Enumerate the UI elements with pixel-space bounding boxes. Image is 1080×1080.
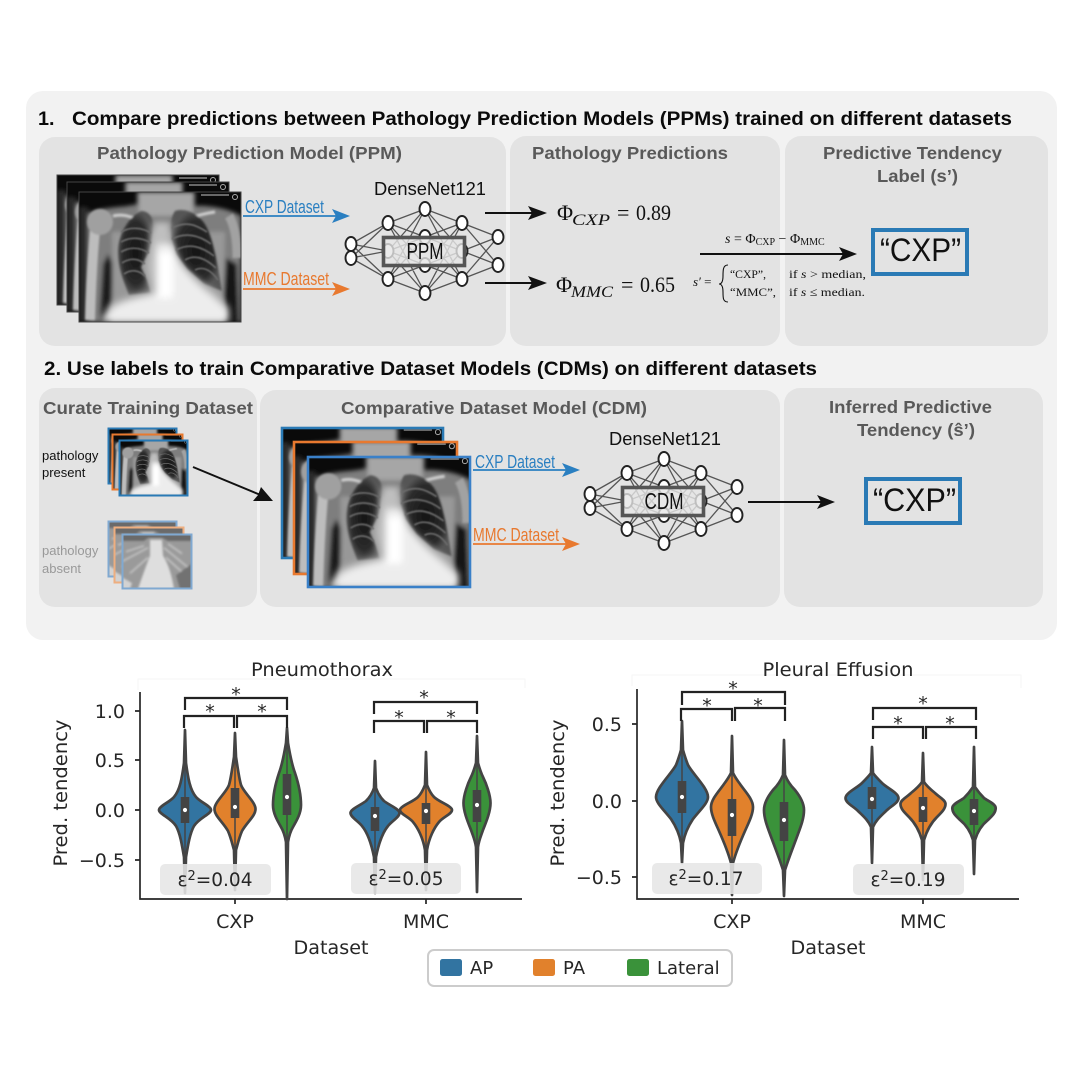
image stack: CDM (281, 427, 471, 588)
image stack: pathology absent (108, 521, 192, 589)
panel: Comparative Dataset Model (260, 390, 780, 607)
neural network: PPM (346, 178, 504, 300)
image stack: pathology present (108, 428, 188, 496)
effect size: MMC 0.19: ε (871, 870, 881, 891)
equation: CXP prediction: CXP (572, 212, 611, 229)
legend: Lateral (657, 958, 720, 979)
significance brackets: Pleural Effusion: * (945, 713, 955, 735)
equation: s definition: MMC (800, 237, 825, 248)
heading 1: 1. (38, 108, 54, 130)
effect size: MMC 0.05: 2 (379, 868, 387, 883)
chart: Pneumothorax violin plot: Pred. tendency (50, 720, 72, 866)
equation: CXP prediction: 0.89 (636, 200, 671, 225)
label box: inferred CXP: “CXP” (873, 482, 956, 518)
neural network: PPM: PPM (406, 238, 444, 264)
significance brackets: Pneumothorax: * (231, 684, 241, 706)
arrow: CXP dataset: CXP Dataset (245, 196, 324, 217)
panel: Predictive Tendency Label (785, 136, 1048, 346)
significance brackets: Pleural Effusion: * (702, 695, 712, 717)
effect size: CXP 0.04: 2 (188, 869, 196, 884)
chart: Pleural Effusion violin plot: 0.5 (592, 714, 622, 736)
chart: Pleural Effusion violin plot: CXP (713, 911, 751, 933)
label: pathology absent (42, 543, 99, 576)
neural network: CDM: CDM (644, 488, 684, 514)
chart: Pneumothorax violin plot: −0.5 (79, 850, 125, 872)
chart: Pleural Effusion violin plot (547, 659, 1021, 959)
effect size: CXP 0.17 (652, 863, 762, 894)
significance brackets: Pneumothorax: * (394, 707, 404, 729)
panel: Inferred Predictive Tendency: Inferred Predictive (829, 397, 992, 417)
equation: piecewise label: if s ≤ median. (789, 285, 865, 299)
chart: Pleural Effusion violin plot: MMC (900, 911, 946, 933)
arrow: CDM MMC dataset: MMC Dataset (473, 524, 559, 545)
equation: MMC prediction: Φ (556, 272, 572, 297)
effect size: CXP 0.04: =0.04 (196, 870, 252, 891)
chart: Pneumothorax violin plot (50, 659, 525, 959)
arrow: to MMC prediction (485, 276, 547, 290)
significance brackets: Pneumothorax (184, 684, 477, 733)
chart: Pneumothorax violin plot: 1.0 (95, 701, 125, 723)
significance brackets: Pneumothorax: * (257, 701, 267, 723)
heading 2: 2. Use labels to train Comparative Dataset Models (CDMs) on different datasets (44, 358, 817, 380)
significance brackets: Pleural Effusion: * (753, 695, 763, 717)
significance brackets: Pleural Effusion: * (728, 678, 738, 700)
effect size: CXP 0.04 (160, 864, 271, 895)
chart: Pneumothorax violin plot: Pneumothorax (251, 659, 393, 681)
effect size: MMC 0.19: 2 (881, 869, 889, 884)
effect size: CXP 0.17: 2 (679, 868, 687, 883)
legend (428, 950, 732, 986)
significance brackets: Pneumothorax: * (205, 701, 215, 723)
effect size: MMC 0.19 (853, 864, 964, 895)
effect size: CXP 0.17: =0.17 (687, 869, 743, 890)
panel: Curate Training Dataset (39, 388, 257, 607)
equation: piecewise label: “MMC”, (730, 285, 776, 299)
equation: piecewise label (693, 265, 866, 302)
chart: Pleural Effusion violin plot: 0.0 (592, 791, 622, 813)
equation: MMC prediction: MMC (570, 284, 614, 301)
significance brackets: Pleural Effusion: * (893, 713, 903, 735)
equation: MMC prediction: = (621, 272, 633, 297)
panel: Predictive Tendency Label: Predictive Tendency (823, 143, 1002, 163)
equation: s definition: s = Φ (725, 232, 756, 247)
panel: Pathology Predictions (510, 136, 780, 346)
arrow: MMC dataset: MMC Dataset (243, 268, 329, 289)
chart: Pneumothorax violin plot: 0.0 (95, 800, 125, 822)
chart: Pleural Effusion violin plot: Dataset (790, 937, 866, 959)
equation: piecewise label: if s > median, (789, 267, 866, 281)
panel: Inferred Predictive Tendency (784, 388, 1043, 607)
significance brackets: Pleural Effusion (681, 678, 976, 739)
arrow: curated data to CDM (193, 467, 273, 501)
panel: Pathology Prediction Model (39, 137, 506, 346)
equation: s definition: − Φ (775, 232, 800, 247)
effect size: MMC 0.19: =0.19 (889, 870, 945, 891)
significance brackets: Pleural Effusion: * (918, 693, 928, 715)
panel: Pathology Prediction Model: Pathology Prediction Model (PPM) (97, 143, 402, 163)
arrow: to CXP prediction (485, 206, 547, 220)
neural network: PPM: DenseNet121 (374, 178, 486, 199)
equation: piecewise label: s′ = (693, 274, 712, 289)
label box: CXP: “CXP” (880, 232, 961, 268)
neural network: CDM: DenseNet121 (609, 428, 721, 449)
panel: Curate Training Dataset: Curate Training Dataset (43, 398, 253, 418)
chart: Pneumothorax violin plot: CXP (216, 911, 254, 933)
arrow: CDM to inferred tendency (748, 495, 835, 509)
effect size: MMC 0.05: ε (369, 869, 379, 890)
outer panel background (26, 91, 1057, 640)
violins: Pleural Effusion (656, 721, 996, 896)
panel: Inferred Predictive Tendency: Tendency (ŝ’) (857, 420, 975, 440)
chart: Pneumothorax violin plot: Dataset (294, 937, 368, 959)
panel: Comparative Dataset Model: Comparative Dataset Model (CDM) (341, 398, 647, 418)
significance brackets: Pneumothorax: * (446, 707, 456, 729)
chart: Pleural Effusion violin plot: Pred. tendency (547, 720, 569, 866)
significance brackets: Pneumothorax: * (419, 687, 429, 709)
equation: CXP prediction: = (617, 200, 629, 225)
legend: AP (470, 958, 493, 979)
equation: CXP prediction: Φ (557, 200, 573, 225)
label: pathology present: pathology (42, 448, 99, 463)
equation: piecewise label: “CXP”, (730, 267, 766, 281)
label: pathology present: present (42, 465, 86, 480)
equation: s definition: CXP (756, 237, 775, 248)
heading 1: Compare predictions between Pathology Prediction Models (PPMs) trained on different datasets (72, 108, 1012, 130)
equation: MMC prediction: 0.65 (640, 272, 675, 297)
label: pathology absent: absent (42, 561, 81, 576)
chart: Pleural Effusion violin plot: Pleural Effusion (762, 659, 914, 681)
effect size: CXP 0.04: ε (178, 870, 188, 891)
arrow: CDM CXP dataset: CXP Dataset (475, 451, 555, 472)
chart: Pneumothorax violin plot: 0.5 (95, 750, 125, 772)
label: pathology absent: pathology (42, 543, 99, 558)
legend: PA (563, 958, 586, 979)
panel: Pathology Predictions: Pathology Predictions (532, 143, 728, 163)
chart: Pneumothorax violin plot: MMC (403, 911, 449, 933)
neural network: CDM (584, 428, 742, 550)
effect size: CXP 0.17: ε (669, 869, 679, 890)
chart: Pleural Effusion violin plot: −0.5 (576, 867, 622, 889)
effect size: MMC 0.05 (351, 863, 461, 894)
arrow: to predictive tendency label (700, 247, 857, 261)
violins: Pneumothorax (159, 728, 490, 899)
effect size: MMC 0.05: =0.05 (387, 869, 443, 890)
label: pathology present (42, 448, 99, 480)
panel: Predictive Tendency Label: Label (s’) (877, 166, 958, 186)
